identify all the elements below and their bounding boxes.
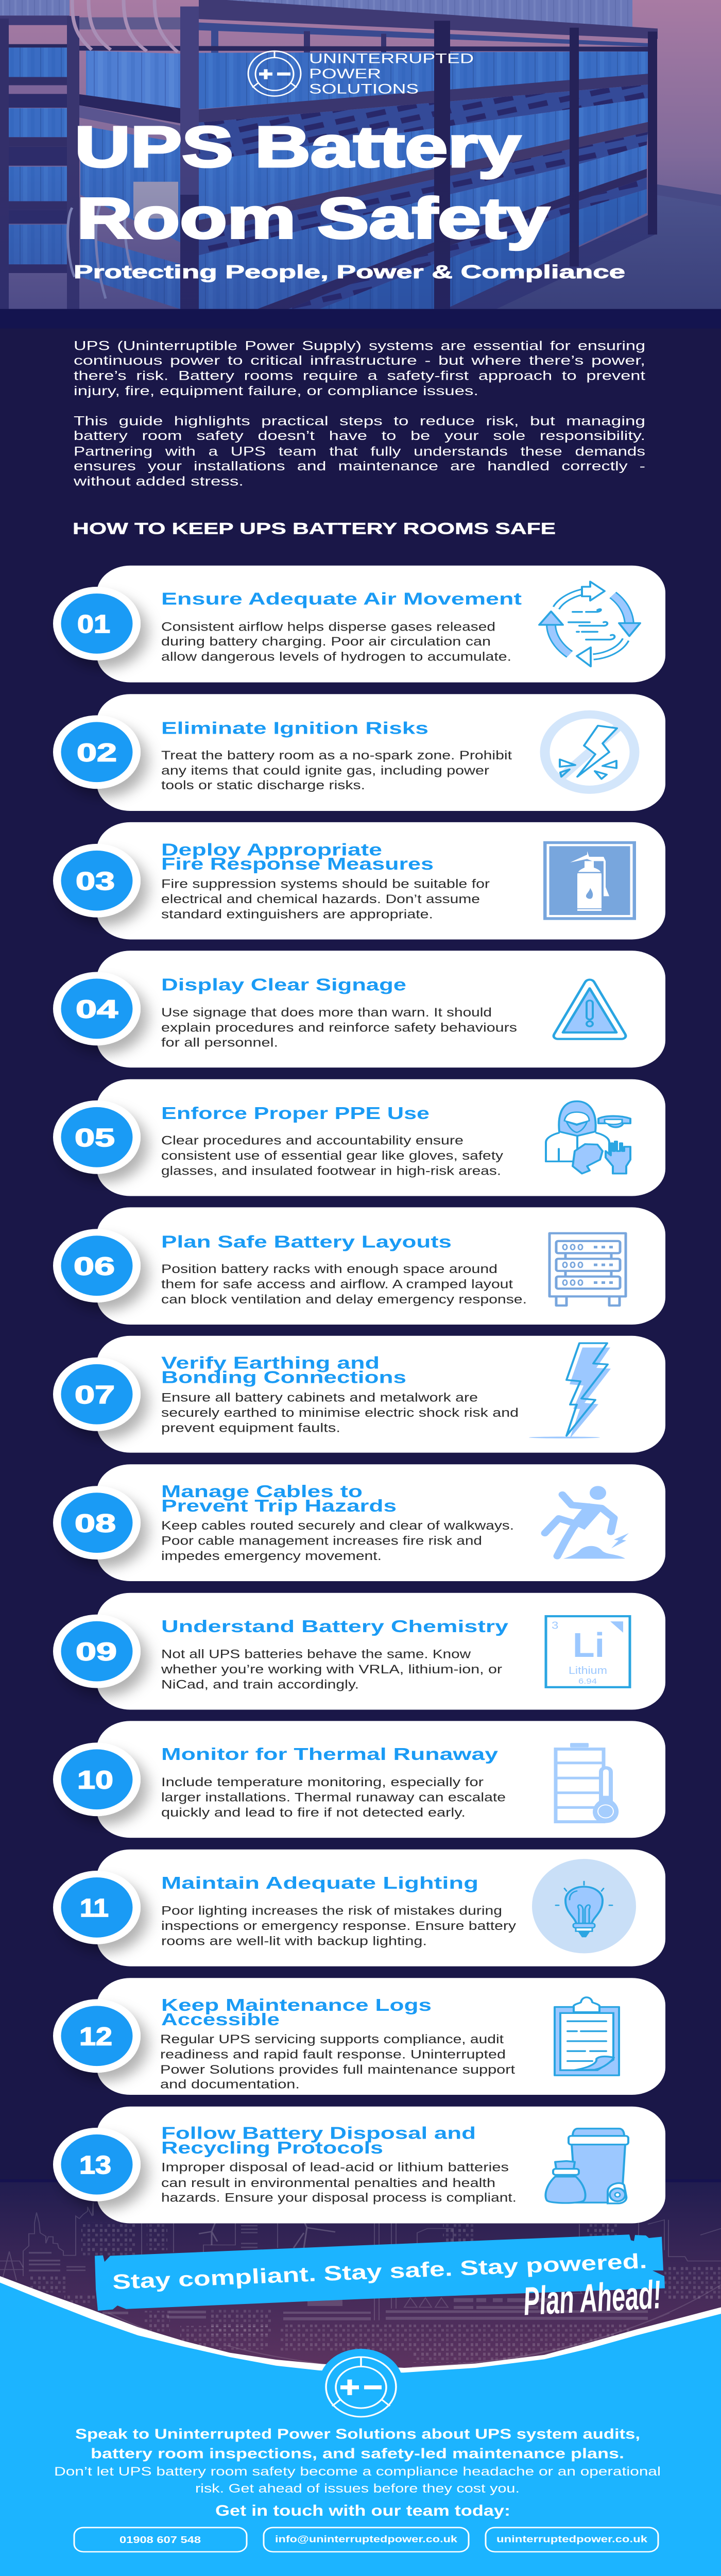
number badge 02: 02 [77, 739, 117, 767]
logo: Uninterrupted Power Solutions: SOLUTIONS [309, 81, 419, 97]
number badge 04: 04 [76, 996, 118, 1023]
logo: Uninterrupted Power Solutions: POWER [309, 66, 381, 81]
card 06: Position battery racks with enough space around [161, 1262, 497, 1276]
footer call to action: risk. Get ahead of issues before they cost you. [195, 2481, 520, 2495]
card 11: inspections or emergency response. Ensure battery [161, 1919, 517, 1933]
card 13: hazards. Ensure your disposal process is compliant. [161, 2191, 517, 2205]
number badge 03: 03 [76, 868, 115, 895]
section heading: HOW TO KEEP UPS BATTERY ROOMS SAFE [73, 519, 556, 538]
card 02: any items that could ignite gas, including power [161, 764, 489, 777]
banner: stay compliant: Stay compliant. Stay safe. Stay powered. [112, 2250, 647, 2294]
icon: no spark [545, 715, 634, 790]
card 09 [53, 1593, 665, 1709]
footer call to action: Speak to Uninterrupted Power Solutions about UPS system audits, [75, 2426, 640, 2442]
card 07 [53, 1336, 665, 1453]
card 06: can block ventilation and delay emergency response. [161, 1292, 527, 1306]
band under hero [0, 309, 721, 328]
intro text: This guide highlights practical steps to reduce risk, but managing [74, 414, 645, 428]
card 05: consistent use of essential gear like gloves, safety [161, 1148, 504, 1162]
intro text: there’s risk. Battery rooms require a safety-first approach to prevent [74, 368, 645, 383]
icon: lithium element tile: 6.94 [578, 1676, 597, 1686]
title: UPS Battery [75, 115, 521, 179]
intro text: Partnering with a UPS team that fully understands these demands [74, 444, 645, 459]
contact button: phone: 01908 607 548 [119, 2535, 201, 2546]
card 04: for all personnel. [161, 1036, 278, 1049]
card 01: during battery charging. Poor air circulation can [161, 634, 491, 649]
card 03: standard extinguishers are appropriate. [161, 907, 433, 921]
contact button: email [264, 2528, 469, 2552]
icon: person tripping [545, 1486, 629, 1558]
hero photo: battery racks [0, 0, 721, 309]
icon: fire extinguisher sign [543, 841, 636, 920]
number badge 05 [53, 1100, 141, 1174]
card 13: can result in environmental penalties and health [161, 2176, 495, 2190]
card 10: quickly and lead to fire if not detected early. [161, 1805, 466, 1819]
card 12: Power Solutions provides full maintenance support [160, 2062, 516, 2076]
footer skyline background [0, 2179, 721, 2372]
intro text: continuous power to critical infrastructure - but where there’s power, [74, 353, 645, 368]
footer call to action: battery room inspections, and safety-led maintenance plans. [91, 2446, 624, 2462]
intro text: battery room safety doesn’t have to be your sole responsibility. [74, 428, 645, 443]
number badge 10 [53, 1742, 141, 1816]
number badge 10: 10 [77, 1767, 113, 1794]
card 13: Recycling Protocols [161, 2138, 383, 2158]
card 10: Include temperature monitoring, especially for [161, 1775, 484, 1789]
icon: clipboard [555, 1997, 619, 2075]
icon: lightning bolt [529, 1343, 611, 1439]
contact button: website [486, 2528, 658, 2552]
footer call to action: Get in touch with our team today: [215, 2502, 510, 2519]
card 03 [53, 822, 665, 939]
number badge 02 [53, 715, 141, 789]
card 04: Display Clear Signage [161, 975, 406, 994]
card 05: glasses, and insulated footwear in high-risk areas. [161, 1164, 501, 1178]
card 13: Improper disposal of lead-acid or lithium batteries [161, 2160, 509, 2174]
number badge 04 [53, 972, 141, 1045]
card 13: Follow Battery Disposal and [161, 2124, 476, 2143]
card 01: Consistent airflow helps disperse gases released [161, 620, 495, 634]
card 08: Manage Cables to [161, 1482, 363, 1501]
card 08: Poor cable management increases fire risk and [161, 1534, 482, 1548]
card 08: Keep cables routed securely and clear of walkways. [161, 1518, 514, 1533]
card 07: Ensure all battery cabinets and metalwork are [161, 1391, 478, 1404]
card 04 [53, 951, 665, 1067]
icon: protective equipment [546, 1101, 630, 1174]
intro text: ensures your installations and maintenance are handled correctly - [74, 459, 645, 473]
icon: lithium element tile: 3 [552, 1619, 558, 1631]
card 04: Use signage that does more than warn. It should [161, 1005, 492, 1019]
contact button: phone [74, 2528, 247, 2552]
number badge 12 [53, 1999, 141, 2073]
card 07: Bonding Connections [161, 1367, 406, 1387]
icon: lithium element tile: Li [573, 1625, 605, 1665]
number badge 13 [53, 2128, 141, 2201]
card 03: Deploy Appropriate [161, 840, 382, 859]
card 11: Maintain Adequate Lighting [161, 1873, 478, 1892]
number badge 11: 11 [80, 1894, 109, 1922]
card 02: tools or static discharge risks. [161, 778, 365, 792]
card 11: rooms are well-lit with backup lighting. [161, 1934, 427, 1948]
number badge 12: 12 [79, 2023, 112, 2050]
card 06 [53, 1207, 665, 1325]
number badge 05: 05 [75, 1124, 115, 1152]
number badge 11 [53, 1871, 141, 1944]
number badge 09: 09 [76, 1638, 117, 1666]
footer logo [326, 2357, 396, 2417]
icon: air circulation [539, 582, 640, 666]
number badge 03 [53, 844, 141, 918]
card 02: Treat the battery room as a no-spark zone. Prohibit [161, 748, 512, 762]
banner: stay compliant [95, 2234, 665, 2311]
card 08: impedes emergency movement. [161, 1549, 382, 1563]
card 12: readiness and rapid fault response. Uninterrupted [160, 2047, 506, 2061]
card 09: Understand Battery Chemistry [161, 1617, 509, 1636]
number badge 01 [53, 587, 141, 660]
number badge 06 [53, 1229, 141, 1302]
card 12: Regular UPS servicing supports compliance, audit [160, 2032, 504, 2046]
card 06: Plan Safe Battery Layouts [161, 1232, 452, 1251]
logo: Uninterrupted Power Solutions [248, 51, 474, 97]
card 12: Keep Maintenance Logs [161, 1995, 432, 2014]
intro text: UPS (Uninterruptible Power Supply) systems are essential for ensuring [74, 338, 645, 353]
card 01 [53, 566, 665, 683]
card 09: Not all UPS batteries behave the same. Know [161, 1647, 471, 1661]
card 12 [53, 1978, 665, 2095]
icon: lithium element tile [546, 1616, 630, 1687]
icon: bin and bag [545, 2129, 628, 2204]
icon: battery with thermometer [556, 1743, 619, 1823]
card 13 [53, 2107, 665, 2223]
number badge 06: 06 [74, 1253, 115, 1280]
icon: lithium element tile: Lithium [569, 1665, 607, 1676]
card 07: securely earthed to minimise electric shock risk and [161, 1405, 519, 1419]
intro text: injury, fire, equipment failure, or compliance issues. [74, 383, 478, 398]
card 04: explain procedures and reinforce safety behaviours [161, 1021, 517, 1035]
footer blue curve panel [0, 2276, 721, 2576]
intro text: without added stress. [73, 474, 244, 488]
number badge 13: 13 [79, 2151, 111, 2179]
card 11 [53, 1850, 665, 1967]
contact button: email: info@uninterruptedpower.co.uk [275, 2534, 458, 2545]
card 07: prevent equipment faults. [161, 1420, 340, 1435]
card 06: them for safe access and airflow. A cramped layout [161, 1277, 513, 1291]
card 01: Ensure Adequate Air Movement [161, 589, 522, 608]
card 10 [53, 1721, 665, 1838]
card 03: Fire Response Measures [161, 854, 434, 874]
card 08 [53, 1464, 665, 1581]
subtitle: Protecting People, Power & Compliance [74, 262, 625, 282]
icon: warning triangle [554, 980, 626, 1039]
card 10: larger installations. Thermal runaway can escalate [161, 1790, 506, 1804]
title: Room Safety [77, 187, 550, 251]
card 12: and documentation. [160, 2077, 300, 2091]
card 02 [53, 694, 665, 811]
card 01: allow dangerous levels of hydrogen to accumulate. [161, 650, 511, 664]
card 11: Poor lighting increases the risk of mistakes during [161, 1904, 502, 1918]
number badge 08: 08 [75, 1510, 116, 1537]
number badge 07: 07 [75, 1381, 115, 1409]
contact button: website: uninterruptedpower.co.uk [496, 2534, 648, 2545]
card 08: Prevent Trip Hazards [161, 1496, 397, 1515]
number badge 08 [53, 1486, 141, 1560]
card 12: Accessible [161, 2010, 280, 2029]
icon: battery rack [550, 1233, 626, 1306]
number badge 01: 01 [77, 611, 110, 638]
card 09: NiCad, and train accordingly. [161, 1677, 359, 1691]
card 03: electrical and chemical hazards. Don’t assume [161, 892, 480, 906]
footer call to action [54, 2426, 661, 2519]
intro text [73, 338, 645, 488]
title [75, 115, 550, 251]
card 05: Clear procedures and accountability ensure [161, 1133, 464, 1147]
icon: light bulb [532, 1859, 636, 1953]
card 09: whether you’re working with VRLA, lithium-ion, or [161, 1662, 502, 1676]
card 07: Verify Earthing and [161, 1353, 380, 1372]
card 03: Fire suppression systems should be suitable for [161, 877, 490, 891]
number badge 09 [53, 1615, 141, 1688]
number badge 07 [53, 1358, 141, 1431]
card 05 [53, 1079, 665, 1196]
card 02: Eliminate Ignition Risks [161, 718, 428, 738]
card 10: Monitor for Thermal Runaway [161, 1744, 499, 1764]
card 05: Enforce Proper PPE Use [161, 1104, 430, 1123]
footer call to action: Don’t let UPS battery room safety become a compliance headache or an operational [54, 2464, 661, 2479]
logo: Uninterrupted Power Solutions: UNINTERRUPTED [309, 51, 474, 66]
